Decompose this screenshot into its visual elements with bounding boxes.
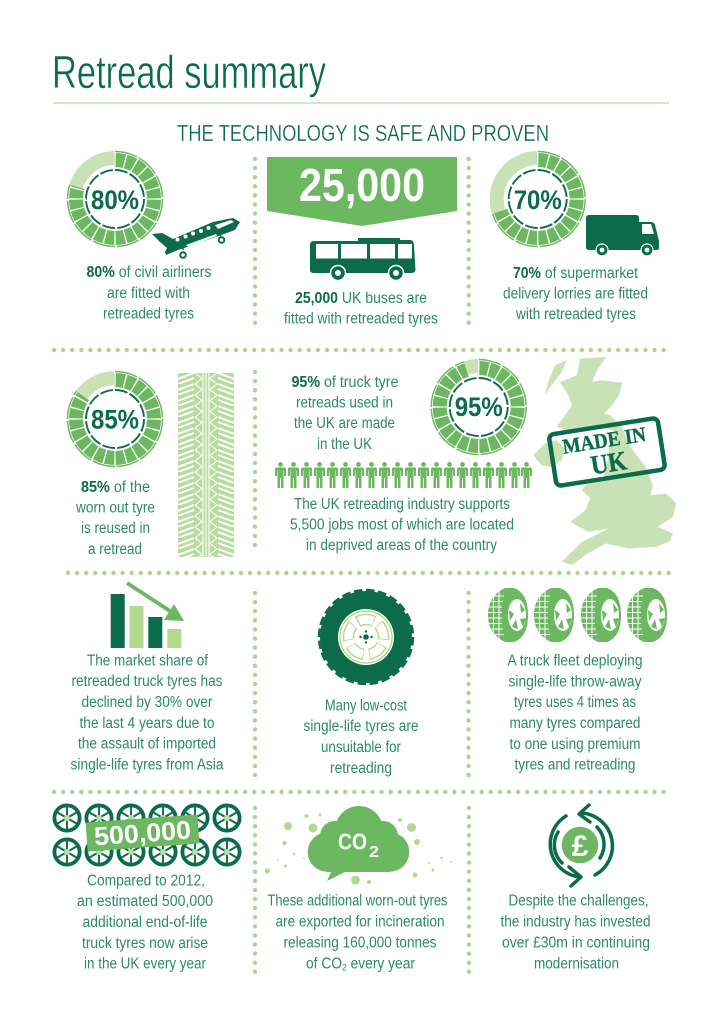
text: market share: the last 4 years due to <box>80 715 214 732</box>
donut chart: 80%: 80% <box>91 185 139 215</box>
donut chart: 85%: 85% <box>91 404 139 434</box>
text: fleet: A truck fleet deploying <box>508 652 642 670</box>
icon: tyre <box>319 590 413 684</box>
pictogram: people <box>275 462 532 488</box>
panel: market share decline <box>70 583 224 774</box>
banner: 25,000: 25,000 <box>299 159 425 211</box>
text: CO2: 2 <box>342 962 347 974</box>
banner: 25,000 <box>267 157 457 226</box>
icon: aeroplane <box>152 218 240 258</box>
text: buses: fitted with retreaded tyres <box>284 310 438 328</box>
text: market share: declined by 30% over <box>82 694 212 711</box>
text: 85% reused: worn out tyre <box>75 500 155 516</box>
text: fleet: tyres uses 4 times as <box>514 694 636 711</box>
stamp: made in UK: UK <box>589 445 629 480</box>
text: airliners <box>86 264 212 322</box>
text: buses: 25,000 UK buses are <box>295 290 427 307</box>
text: CO2: releasing 160,000 tonnes <box>284 934 437 952</box>
panel: supermarket lorries <box>490 152 659 323</box>
banner: 500,000: 500,000 <box>93 814 192 852</box>
text: end-of-life: in the UK every year <box>84 956 206 972</box>
stamp: made in UK: MADE IN <box>561 422 648 459</box>
heading: THE TECHNOLOGY IS SAFE AND PROVEN <box>177 120 549 146</box>
text: CO2: every year <box>347 956 415 972</box>
text: fleet: tyres and retreading <box>514 756 636 774</box>
icon: CO2 cloud: CO <box>338 828 367 854</box>
text: market share <box>70 652 224 774</box>
text: end-of-life: additional end-of-life <box>82 914 208 931</box>
panel: fleet tyres <box>488 588 667 774</box>
text: low-cost: single-life tyres are <box>304 718 418 735</box>
arrow: decline <box>127 583 184 621</box>
text: 95% made in UK: the UK are made <box>294 415 395 432</box>
donut chart: 95%: 95% <box>455 392 503 422</box>
text: 95% made in UK: 95% of truck tyre <box>292 374 398 391</box>
donut chart: 85% <box>68 372 162 466</box>
panel: worn out tyre reuse <box>68 372 234 558</box>
text: end-of-life: an estimated 500,000 <box>77 893 213 910</box>
text: jobs: 5,500 jobs most of which are located <box>290 516 514 534</box>
text: CO2: are exported for incineration <box>276 914 444 930</box>
text: fleet: single-life throw-away <box>508 674 642 690</box>
text: low-cost: unsuitable for <box>321 739 401 756</box>
text: low-cost: retreading <box>330 760 392 777</box>
text: CO2: These additional worn-out tyres <box>268 892 448 910</box>
text: fleet: to one using premium <box>510 736 640 753</box>
icon: tyre tread strip <box>178 373 234 557</box>
text: lorries: delivery lorries are fitted <box>503 286 648 302</box>
text: CO2: of CO <box>306 956 346 972</box>
text: 95% made in UK: retreads used in <box>296 394 393 412</box>
text: jobs: The UK retreading industry supports <box>294 496 510 513</box>
text: 85% reused: 85% of the <box>81 479 150 496</box>
donut chart: 95% <box>431 360 526 454</box>
text: airliners: are fitted with <box>107 285 190 302</box>
text: CO2 <box>268 892 448 974</box>
text: investment: Despite the challenges, <box>508 892 648 910</box>
text: end-of-life: truck tyres now arise <box>82 935 208 952</box>
text: low-cost: Many low-cost <box>325 698 408 714</box>
text: 95% made in UK: in the UK <box>317 436 373 453</box>
text: end-of-life <box>77 872 213 972</box>
text: jobs <box>290 496 514 554</box>
text: lorries: with retreaded tyres <box>515 306 636 323</box>
text: investment: the industry has invested <box>500 914 650 930</box>
text: 85% reused: is reused in <box>81 520 150 537</box>
text: end-of-life: Compared to 2012, <box>87 872 205 890</box>
panel: CO2 <box>265 806 452 974</box>
panel: investment <box>500 805 650 972</box>
text: investment: modernisation <box>534 956 619 972</box>
panel: low-cost tyres <box>304 590 418 777</box>
text: market share: the assault of imported <box>78 736 216 752</box>
donut chart: 70%: 70% <box>514 185 562 215</box>
text: jobs: in deprived areas of the country <box>306 537 497 554</box>
text: market share: The market share of <box>87 652 209 670</box>
donut chart: 80% <box>68 152 162 246</box>
panel: buses <box>267 157 457 328</box>
donut chart: 70% <box>490 152 585 246</box>
icon: CO2 cloud: 2 <box>369 844 379 861</box>
text: market share: retreaded truck tyres has <box>72 673 223 690</box>
text: airliners: retreaded tyres <box>103 306 194 322</box>
stamp: made in UK <box>549 418 665 486</box>
text: investment: over £30m in continuing <box>502 934 650 952</box>
text: 85% reused <box>75 479 155 558</box>
icon: CO2 cloud <box>265 806 452 884</box>
text: 95% made in UK <box>292 374 398 453</box>
text: low-cost <box>304 698 418 777</box>
text: market share: single-life tyres from Asia <box>70 756 224 774</box>
icon: bus <box>310 238 416 280</box>
text: airliners: 80% of civil airliners <box>86 264 212 281</box>
panel: made in the UK <box>275 357 676 565</box>
title: Retread summary <box>52 46 326 98</box>
text: lorries: 70% of supermarket <box>513 265 639 282</box>
icon: pound cycle <box>550 805 612 886</box>
icon: lorry <box>586 215 659 256</box>
icon: wheels grid <box>54 805 240 865</box>
bar chart <box>111 594 181 648</box>
icon: pound cycle: £ <box>572 830 589 863</box>
text: 85% reused: a retread <box>88 541 142 558</box>
panel: civil airliners <box>68 152 240 322</box>
text: buses <box>284 290 438 328</box>
icon: four tyres <box>488 588 667 642</box>
text: fleet: many tyres compared <box>510 715 640 732</box>
text: lorries <box>503 265 648 323</box>
map: United Kingdom <box>533 357 676 565</box>
text: fleet <box>508 652 642 774</box>
text: investment <box>500 892 650 972</box>
panel: 500,000 tyres <box>54 805 240 972</box>
